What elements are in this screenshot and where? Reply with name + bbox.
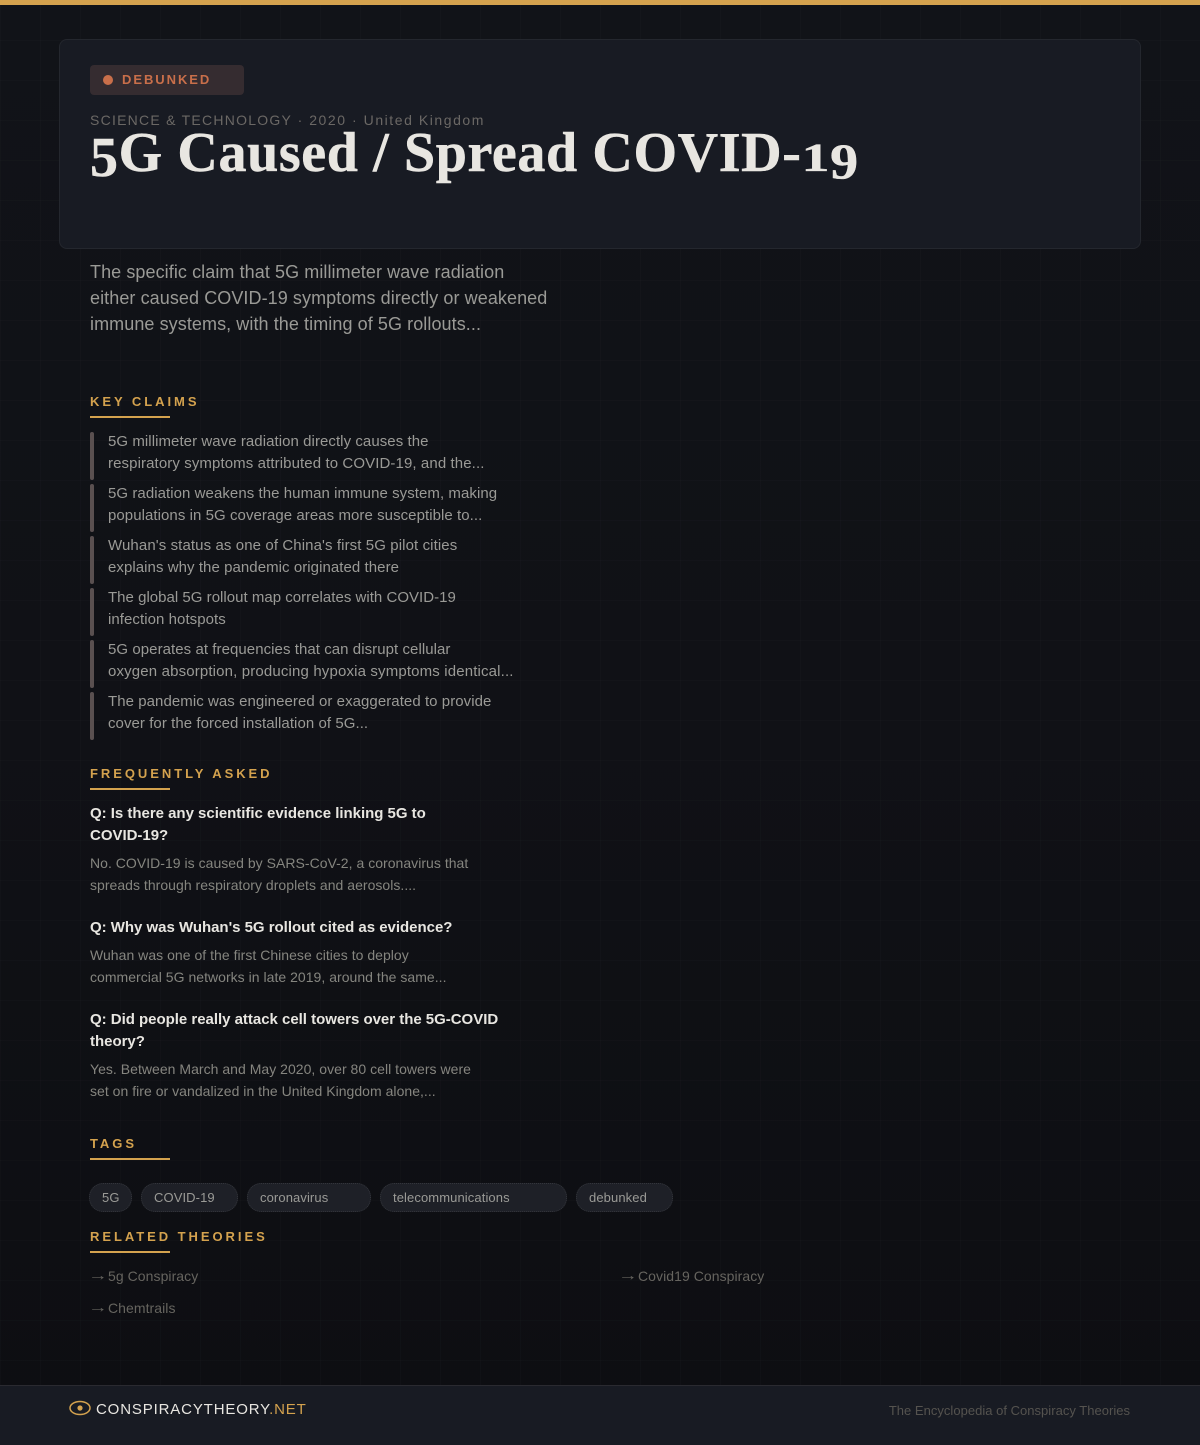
title: G Caused / Spread COVID- — [119, 122, 801, 184]
status badge: debunked — [90, 65, 244, 95]
question 3 — [90, 1011, 498, 1050]
claim 3: Wuhan's status as one of China's first 5G pilot cities — [108, 537, 457, 554]
claim 5: oxygen absorption, producing hypoxia symptoms identical... — [108, 663, 514, 680]
summary text — [90, 262, 547, 334]
answer 2: Wuhan was one of the first Chinese cities to deploy — [90, 947, 409, 963]
title: 5 — [90, 127, 119, 189]
question 2: Q: Why was Wuhan's 5G rollout cited as evidence? — [90, 919, 452, 936]
icon: status dot — [103, 75, 113, 85]
answer 2: commercial 5G networks in late 2019, around the same... — [90, 969, 446, 985]
related link: chemtrails: → — [88, 1299, 108, 1315]
panel: footer — [0, 1385, 1200, 1445]
top accent bar — [0, 0, 1200, 5]
claim 4: The global 5G rollout map correlates with COVID-19 — [108, 589, 456, 606]
claim 5 — [90, 640, 514, 688]
claim 5: 5G operates at frequencies that can disrupt cellular — [108, 641, 450, 658]
badge label: DEBUNKED — [122, 72, 211, 87]
logo wordmark: CONSPIRACYTHEORY.NET — [96, 1401, 307, 1418]
related link: 5g conspiracy: 5g Conspiracy — [108, 1268, 198, 1284]
claim 3: explains why the pandemic originated there — [108, 559, 399, 576]
answer 1: No. COVID-19 is caused by SARS-CoV-2, a coronavirus that — [90, 855, 468, 871]
answer 3: set on fire or vandalized in the United Kingdom alone,... — [90, 1083, 436, 1099]
answer 2 — [90, 947, 446, 985]
icon: eye logo — [69, 1400, 91, 1416]
claim 6: cover for the forced installation of 5G... — [108, 715, 368, 732]
tag: 5G: 5G — [102, 1190, 120, 1205]
claim 1: respiratory symptoms attributed to COVID-19, and the... — [108, 455, 484, 472]
question 3: theory? — [90, 1033, 145, 1050]
tag: debunked: debunked — [589, 1190, 647, 1205]
question 1 — [90, 805, 426, 844]
answer 3 — [90, 1061, 471, 1099]
tag: telecommunications — [380, 1183, 567, 1212]
category meta line: SCIENCE & TECHNOLOGY · 2020 · United Kingdom — [90, 112, 485, 128]
question 1: Q: Is there any scientific evidence linking 5G to — [90, 805, 426, 822]
question 3: Q: Did people really attack cell towers over the 5G-COVID — [90, 1011, 498, 1028]
summary text: either caused COVID-19 symptoms directly or weakened — [90, 288, 547, 308]
claim 6: The pandemic was engineered or exaggerated to provide — [108, 693, 491, 710]
related link: chemtrails: Chemtrails — [108, 1300, 176, 1316]
tag: 5G — [89, 1183, 132, 1212]
heading: tags: TAGS — [90, 1136, 137, 1151]
tag: COVID-19: COVID-19 — [154, 1190, 215, 1205]
claim 4 — [90, 588, 456, 636]
question 1: COVID-19? — [90, 827, 168, 844]
claim 2: populations in 5G coverage areas more susceptible to... — [108, 507, 482, 524]
tag: debunked — [576, 1183, 673, 1212]
summary text: immune systems, with the timing of 5G rollouts... — [90, 314, 481, 334]
claim 1 — [90, 432, 484, 480]
claim 1: 5G millimeter wave radiation directly causes the — [108, 433, 429, 450]
related link: 5g conspiracy: → — [88, 1267, 108, 1283]
claim 2 — [90, 484, 497, 532]
claim 6 — [90, 692, 491, 740]
heading: related theories: RELATED THEORIES — [90, 1229, 268, 1244]
answer 1 — [90, 855, 468, 893]
tag: telecommunications: telecommunications — [393, 1190, 510, 1205]
title: 9 — [830, 135, 859, 189]
tag: coronavirus — [247, 1183, 371, 1212]
summary text: The specific claim that 5G millimeter wave radiation — [90, 262, 504, 282]
panel: header card — [59, 39, 1141, 249]
related link: covid19 conspiracy: → — [618, 1267, 638, 1283]
title: 1 — [801, 136, 830, 180]
answer 3: Yes. Between March and May 2020, over 80 cell towers were — [90, 1061, 471, 1077]
footer tagline: The Encyclopedia of Conspiracy Theories — [889, 1403, 1130, 1418]
claim 3 — [90, 536, 457, 584]
claim 4: infection hotspots — [108, 611, 226, 628]
tag: COVID-19 — [141, 1183, 238, 1212]
claim 2: 5G radiation weakens the human immune system, making — [108, 485, 497, 502]
related link: covid19 conspiracy: Covid19 Conspiracy — [638, 1268, 764, 1284]
answer 1: spreads through respiratory droplets and aerosols.... — [90, 877, 416, 893]
heading: frequently asked: FREQUENTLY ASKED — [90, 766, 273, 781]
tag: coronavirus: coronavirus — [260, 1190, 328, 1205]
heading: key claims: KEY CLAIMS — [90, 394, 199, 409]
